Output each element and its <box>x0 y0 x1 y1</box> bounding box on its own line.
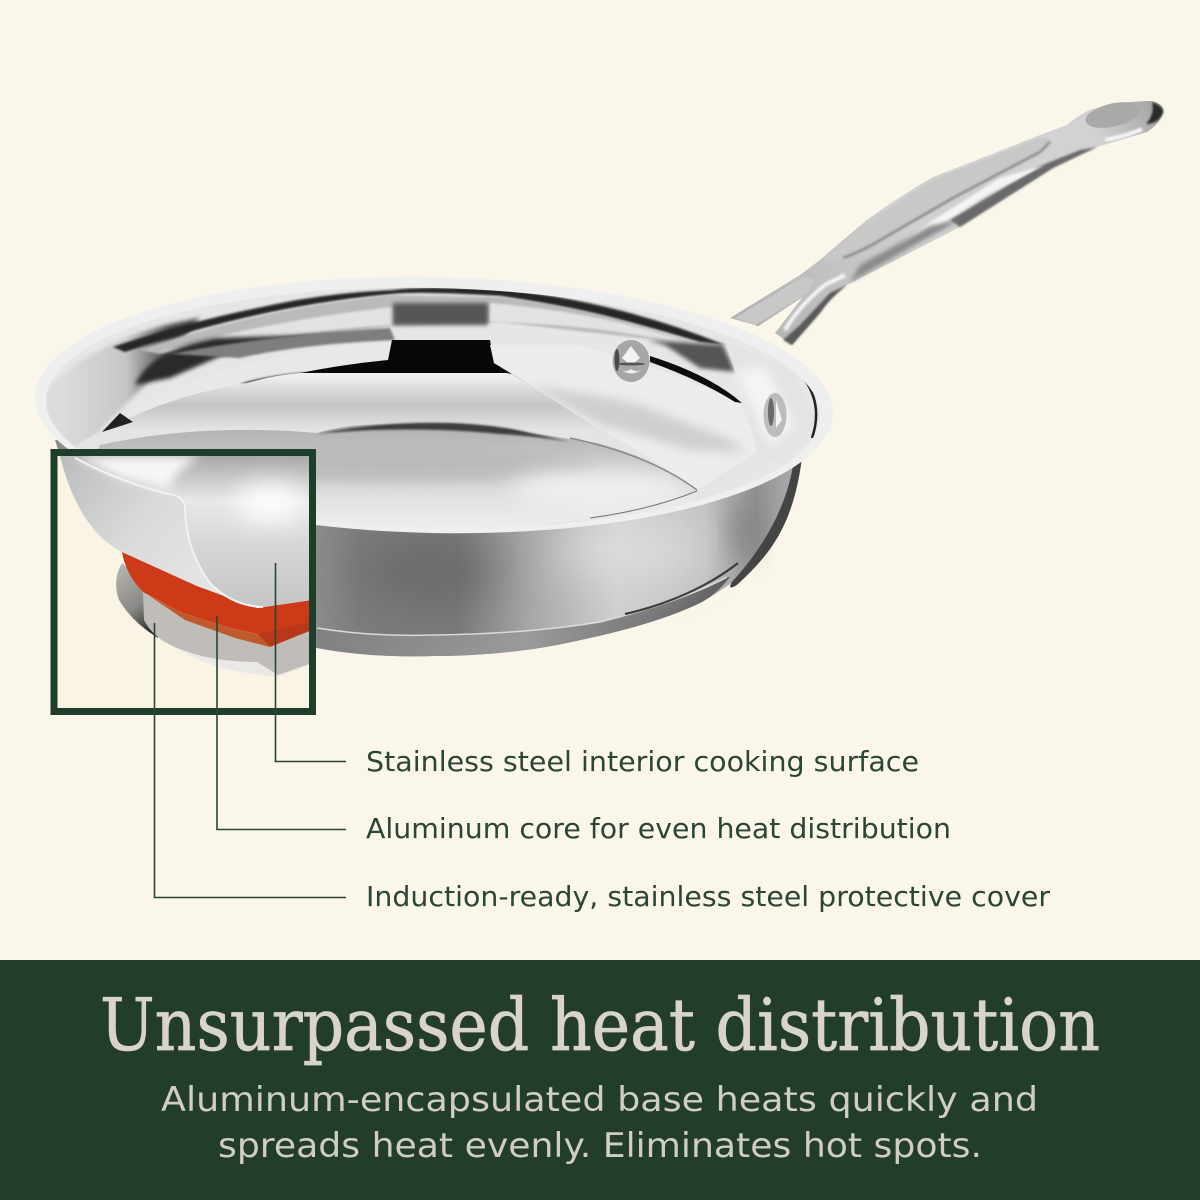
callout: stainless steel interior: Stainless steel interior cooking surface <box>366 745 919 778</box>
light bottom cover <box>172 646 309 677</box>
icon: pan rim <box>32 269 836 541</box>
right white wall <box>490 345 640 428</box>
heading: Unsurpassed heat distribution <box>100 983 1100 1067</box>
aluminum edge <box>148 595 270 647</box>
dark grey block <box>393 303 488 325</box>
panel: bottom banner <box>0 960 1200 1200</box>
icon: pan interior <box>46 288 820 526</box>
panel: cutaway inset <box>54 452 312 712</box>
right upper dark reflection <box>647 340 735 372</box>
mid band <box>76 373 588 449</box>
callout: protective cover <box>154 623 1050 913</box>
callout: aluminum core <box>217 616 951 845</box>
dark red wedge <box>258 622 312 647</box>
floor top dark arc <box>317 423 570 442</box>
black block <box>300 340 530 385</box>
body text: Aluminum-encapsulated base heats quickly and <box>161 1080 1038 1120</box>
dark sweep <box>135 333 380 385</box>
icon: rivet near <box>612 340 650 382</box>
bowl interior section <box>75 456 312 607</box>
floor <box>98 423 696 494</box>
exterior wall section <box>60 456 312 608</box>
red aluminum core <box>122 552 312 637</box>
base ring <box>116 563 158 638</box>
top thin dark ring <box>113 288 725 352</box>
light strip <box>160 307 393 352</box>
grey cover <box>143 592 312 675</box>
right outer wall <box>726 346 736 372</box>
callout: aluminum core: Aluminum core for even heat distribution <box>366 812 951 845</box>
body text <box>161 1080 1038 1166</box>
icon: pan handle <box>730 97 1163 345</box>
callout: protective cover: Induction-ready, stainless steel protective cover <box>366 880 1050 913</box>
icon: pan exterior body <box>55 440 803 656</box>
frying pan photo <box>32 97 1163 656</box>
white strip <box>127 342 392 420</box>
left wall <box>45 318 200 460</box>
body text: spreads heat evenly. Eliminates hot spots. <box>218 1126 982 1166</box>
inset frame <box>54 452 312 712</box>
icon: rivet far <box>764 393 786 437</box>
callout: stainless steel interior <box>276 563 919 778</box>
